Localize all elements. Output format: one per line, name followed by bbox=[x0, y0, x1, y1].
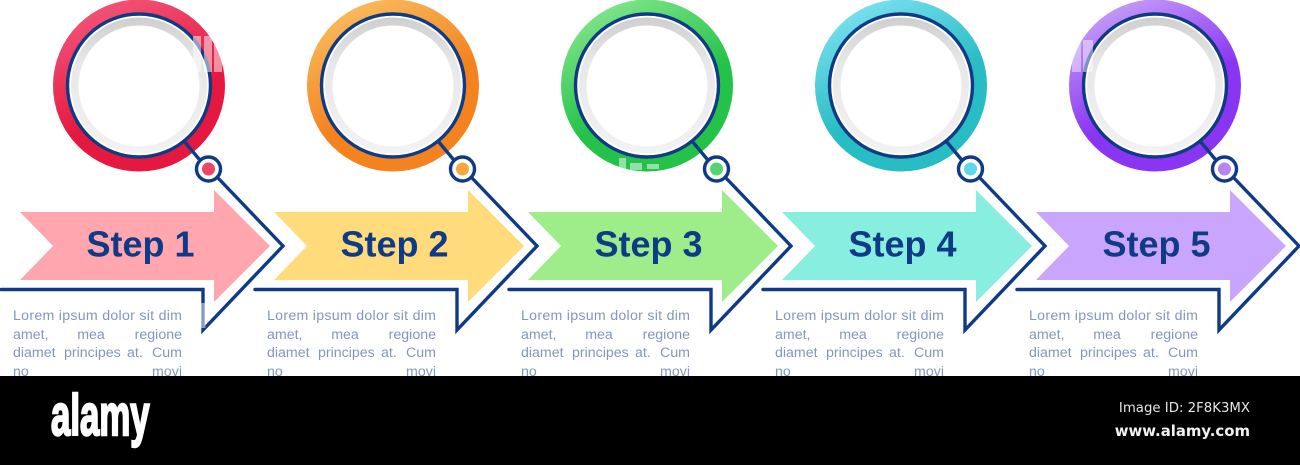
step 2 body text: movi bbox=[406, 364, 436, 380]
step 2 body text: Lorem ipsum dolor sit dim bbox=[267, 308, 436, 324]
step 5 body text: no bbox=[1029, 364, 1045, 380]
step 3 body text: mea bbox=[585, 327, 613, 343]
step 3 body text: Cum bbox=[660, 345, 690, 361]
step 3 body text: Lorem ipsum dolor sit dim bbox=[521, 308, 690, 324]
step 1 label: Step 1 bbox=[86, 224, 195, 264]
step 1 body text: mea bbox=[77, 327, 105, 343]
step 5 bbox=[1017, 0, 1299, 380]
step 2 medallion bbox=[307, 0, 479, 172]
step 3 body text: amet, bbox=[521, 327, 556, 343]
step 2 body text: diamet bbox=[267, 345, 310, 361]
step 5 body text bbox=[1029, 308, 1198, 380]
step 2 body text: regione bbox=[389, 327, 436, 343]
step 1 body text bbox=[13, 308, 182, 380]
step 5 body text: regione bbox=[1151, 327, 1198, 343]
step 1 arrow bbox=[20, 190, 270, 302]
watermark fragment bbox=[619, 158, 659, 170]
step 3 body text: regione bbox=[643, 327, 690, 343]
step 3 body text: diamet bbox=[521, 345, 564, 361]
step 3 body text: movi bbox=[660, 364, 690, 380]
step 1 body text: no bbox=[13, 364, 29, 380]
step 4 label: Step 4 bbox=[848, 224, 957, 264]
image id: Image ID: 2F8K3MX bbox=[1119, 401, 1250, 416]
step 3 label: Step 3 bbox=[594, 224, 703, 264]
step 5 body text: Cum bbox=[1168, 345, 1198, 361]
step 4 body text: Lorem ipsum dolor sit dim bbox=[775, 308, 944, 324]
site url: www.alamy.com bbox=[1115, 422, 1250, 440]
step 2 label: Step 2 bbox=[340, 224, 449, 264]
step 5 connector bbox=[1200, 141, 1236, 181]
step 2 body text: Cum bbox=[406, 345, 436, 361]
step 5 label: Step 5 bbox=[1102, 224, 1211, 264]
step 5 body text: diamet bbox=[1029, 345, 1072, 361]
step 5 medallion bbox=[1069, 0, 1241, 172]
watermark fragment bbox=[1072, 38, 1093, 72]
step 4 body text: diamet bbox=[775, 345, 818, 361]
step 5 body text: principes bbox=[1080, 345, 1137, 361]
step 1 body text: principes bbox=[64, 345, 121, 361]
step 4 arrow outline bbox=[763, 178, 1045, 330]
step 1 body text: Lorem ipsum dolor sit dim bbox=[13, 308, 182, 324]
step 5 body text: movi bbox=[1168, 364, 1198, 380]
step 4 connector bbox=[946, 141, 982, 181]
step 2 body text: at. bbox=[381, 345, 397, 361]
watermark fragment bbox=[193, 36, 222, 328]
step 5 body text: at. bbox=[1143, 345, 1159, 361]
step 4 arrow bbox=[782, 190, 1032, 302]
step 2 body text: mea bbox=[331, 327, 359, 343]
step 4 body text: amet, bbox=[775, 327, 810, 343]
footer band bbox=[0, 376, 1300, 465]
step 2 connector bbox=[438, 141, 474, 181]
step 4 body text: at. bbox=[889, 345, 905, 361]
step 5 body text: mea bbox=[1093, 327, 1121, 343]
step 4 body text: no bbox=[775, 364, 791, 380]
step 3 bbox=[509, 0, 791, 380]
step 1 bbox=[1, 0, 283, 380]
step 2 body text: no bbox=[267, 364, 283, 380]
step 3 body text: principes bbox=[572, 345, 629, 361]
step 1 body text: diamet bbox=[13, 345, 56, 361]
step 1 body text: movi bbox=[152, 364, 182, 380]
step 4 medallion bbox=[815, 0, 987, 172]
step 3 arrow outline bbox=[509, 178, 791, 330]
step 1 body text: amet, bbox=[13, 327, 48, 343]
step 4 bbox=[763, 0, 1045, 380]
step 4 body text: movi bbox=[914, 364, 944, 380]
step 3 body text: at. bbox=[635, 345, 651, 361]
step 2 bbox=[255, 0, 537, 380]
step 4 body text: regione bbox=[897, 327, 944, 343]
step 4 body text: Cum bbox=[914, 345, 944, 361]
step 1 medallion bbox=[53, 0, 225, 172]
step 5 body text: Lorem ipsum dolor sit dim bbox=[1029, 308, 1198, 324]
step 1 arrow outline bbox=[1, 178, 283, 330]
step 1 body text: regione bbox=[135, 327, 182, 343]
step 3 body text: no bbox=[521, 364, 537, 380]
step 3 connector bbox=[692, 141, 728, 181]
step 4 body text: principes bbox=[826, 345, 883, 361]
step 2 arrow outline bbox=[255, 178, 537, 330]
step 5 arrow outline bbox=[1017, 178, 1299, 330]
step 2 body text bbox=[267, 308, 436, 380]
step 4 body text bbox=[775, 308, 944, 380]
step 4 body text: mea bbox=[839, 327, 867, 343]
alamy logo: alamy bbox=[51, 384, 150, 448]
step 2 body text: amet, bbox=[267, 327, 302, 343]
step 2 body text: principes bbox=[318, 345, 375, 361]
step 1 body text: at. bbox=[127, 345, 143, 361]
step 2 arrow bbox=[274, 190, 524, 302]
step 5 body text: amet, bbox=[1029, 327, 1064, 343]
step 3 body text bbox=[521, 308, 690, 380]
step 5 arrow bbox=[1036, 190, 1286, 302]
step 3 medallion bbox=[561, 0, 733, 172]
step 3 arrow bbox=[528, 190, 778, 302]
step 1 body text: Cum bbox=[152, 345, 182, 361]
step 1 connector bbox=[184, 141, 220, 181]
